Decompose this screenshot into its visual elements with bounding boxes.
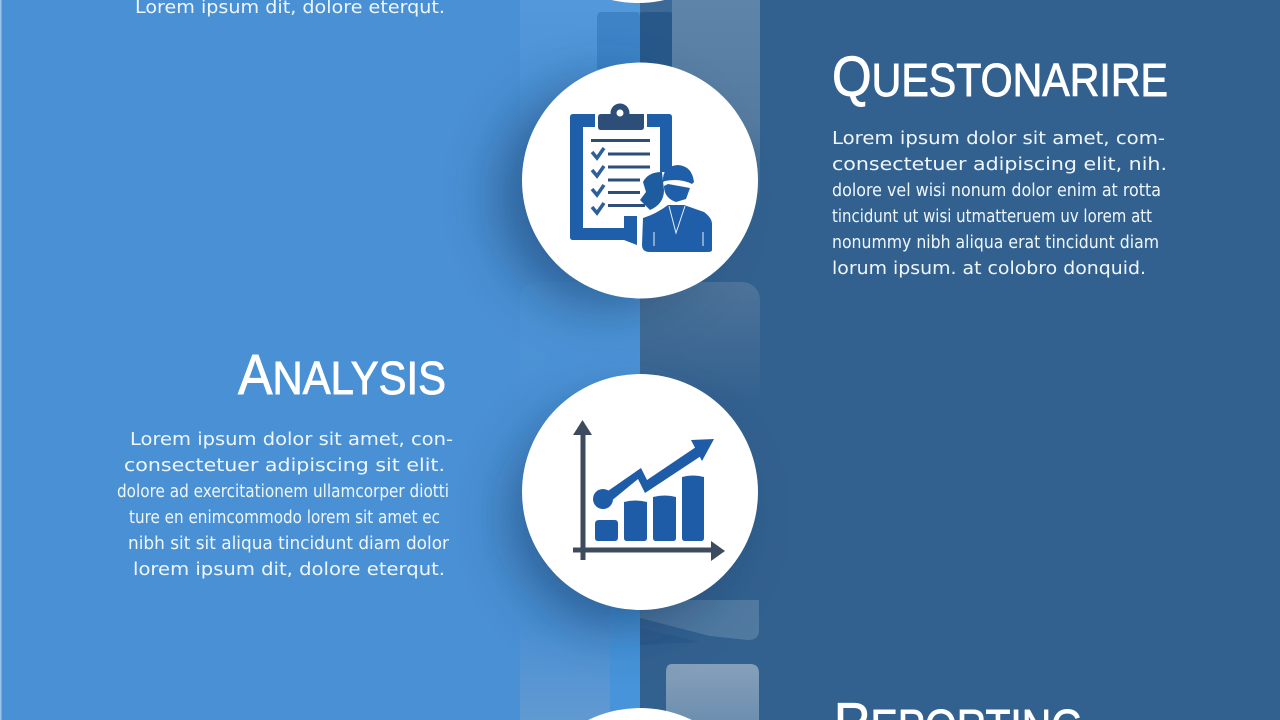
left edge highlight: [0, 0, 2, 720]
text block: analysis body: nibh sit sit aliqua tincidunt diam dolor: [128, 534, 450, 554]
icon: growth bar chart: [573, 420, 725, 561]
text block: analysis body: consectetuer adipiscing sit elit.: [124, 456, 445, 476]
panel: right navy background: [640, 0, 1280, 720]
text block: questionnaire body: Lorem ipsum dolor sit amet, com-: [832, 129, 1165, 149]
step: reporting circle top edge: [522, 708, 758, 720]
heading: Questonarire: QUESTONARIRE: [832, 45, 1168, 109]
text block: questionnaire body: dolore vel wisi nonum dolor enim at rotta: [832, 181, 1161, 201]
step: questionnaire circle: [522, 62, 758, 298]
text block: analysis body: [117, 430, 453, 580]
text block: questionnaire body: consectetuer adipiscing elit, nih.: [832, 155, 1167, 175]
text block: analysis body: lorem ipsum dit, dolore eterqut.: [133, 560, 445, 580]
top circle fragment: [520, 0, 756, 3]
step: analysis circle: [522, 374, 758, 610]
text block: questionnaire body: lorum ipsum. at colobro donquid.: [832, 259, 1146, 279]
text block: analysis body: Lorem ipsum dolor sit amet, con-: [130, 430, 453, 450]
white circle: [522, 374, 758, 610]
heading: Analysis: ANALYSIS: [238, 343, 446, 407]
text block: analysis body: dolore ad exercitationem ullamcorper diotti: [117, 482, 449, 502]
icon: clipboard with person: [570, 104, 712, 252]
panel: left blue background: [0, 0, 640, 720]
white circle: [522, 62, 758, 298]
text block: analysis body: ture en enimcommodo lorem sit amet ec: [129, 508, 440, 528]
circle shadows: [498, 84, 734, 628]
text block: questionnaire body: nonummy nibh aliqua erat tincidunt diam: [832, 233, 1159, 253]
text block: questionnaire body: [832, 129, 1167, 279]
decorative central band: [520, 0, 760, 720]
text block: questionnaire body: tincidunt ut wisi utmatteruem uv lorem att: [832, 207, 1152, 227]
